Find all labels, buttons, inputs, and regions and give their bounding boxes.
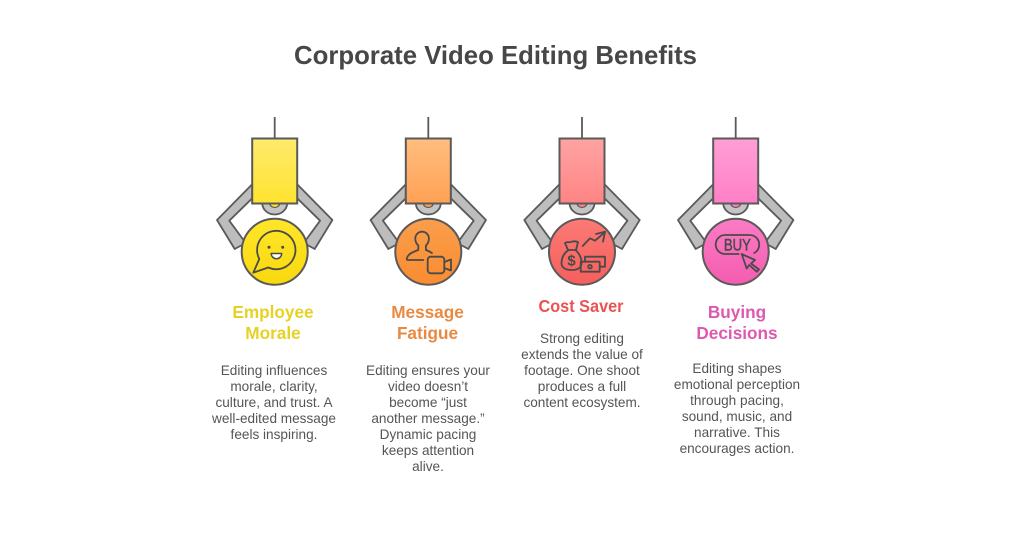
text: Employee Morale description: Editing influences <box>221 363 327 378</box>
claw: Buying Decisions <box>678 117 793 249</box>
text: Cost Saver description: extends the value of <box>521 347 643 362</box>
icon: buy button with cursor: BUY <box>724 236 751 255</box>
text: Message Fatigue description: become “just <box>389 395 467 410</box>
icon: buy button with cursor <box>703 219 769 285</box>
text: Cost Saver description: content ecosystem. <box>523 395 641 410</box>
text: Cost Saver description: produces a full <box>538 379 626 394</box>
text: Message Fatigue description: Editing ensures your <box>366 363 490 378</box>
text: Buying Decisions description: Editing shapes <box>692 361 782 376</box>
text: Message Fatigue description: video doesn’t <box>388 379 468 394</box>
heading: Buying Decisions: Buying <box>708 302 766 322</box>
heading: Message Fatigue: Message <box>391 302 464 322</box>
claw: Message Fatigue <box>371 117 486 249</box>
text: Buying Decisions description: narrative. This <box>694 425 780 440</box>
text: Cost Saver description: Strong editing <box>540 331 624 346</box>
panel: Cost Saver <box>521 117 643 410</box>
icon: money bag, cash and rising arrow <box>549 219 615 285</box>
text: Message Fatigue description: Dynamic pacing <box>380 427 476 442</box>
text: Buying Decisions description: sound, music, and <box>682 409 792 424</box>
text: Employee Morale description: feels inspiring. <box>231 427 317 442</box>
text: Buying Decisions description: through pacing, <box>690 393 784 408</box>
heading: Buying Decisions: Decisions <box>696 323 778 343</box>
panel: Buying Decisions <box>674 117 800 456</box>
text: Buying Decisions description: encourages action. <box>680 441 794 456</box>
text: Message Fatigue description: another message.” <box>371 411 485 426</box>
heading: Employee Morale: Morale <box>245 323 301 343</box>
text: Message Fatigue description: alive. <box>412 459 444 474</box>
text: Employee Morale description: well-edited message <box>211 411 336 426</box>
claw: Cost Saver <box>524 117 640 249</box>
heading: Cost Saver: Cost Saver <box>538 296 624 316</box>
panel: Message Fatigue <box>366 117 490 474</box>
text: Message Fatigue description: keeps attention <box>382 443 474 458</box>
text: Employee Morale description: morale, clarity, <box>230 379 318 394</box>
heading: Employee Morale: Employee <box>232 302 314 322</box>
claw: Employee Morale <box>217 117 332 249</box>
text: Cost Saver description: footage. One shoot <box>524 363 640 378</box>
title: Corporate Video Editing Benefits <box>294 40 697 70</box>
icon: person with video camera <box>395 219 461 285</box>
icon: smiling speech bubble <box>242 219 308 285</box>
heading: Message Fatigue: Fatigue <box>397 323 458 343</box>
icon: money bag, cash and rising arrow: $ <box>567 252 576 270</box>
text: Employee Morale description: culture, and trust. A <box>215 395 333 410</box>
panel: Employee Morale <box>211 117 336 442</box>
text: Buying Decisions description: emotional perception <box>674 377 800 392</box>
